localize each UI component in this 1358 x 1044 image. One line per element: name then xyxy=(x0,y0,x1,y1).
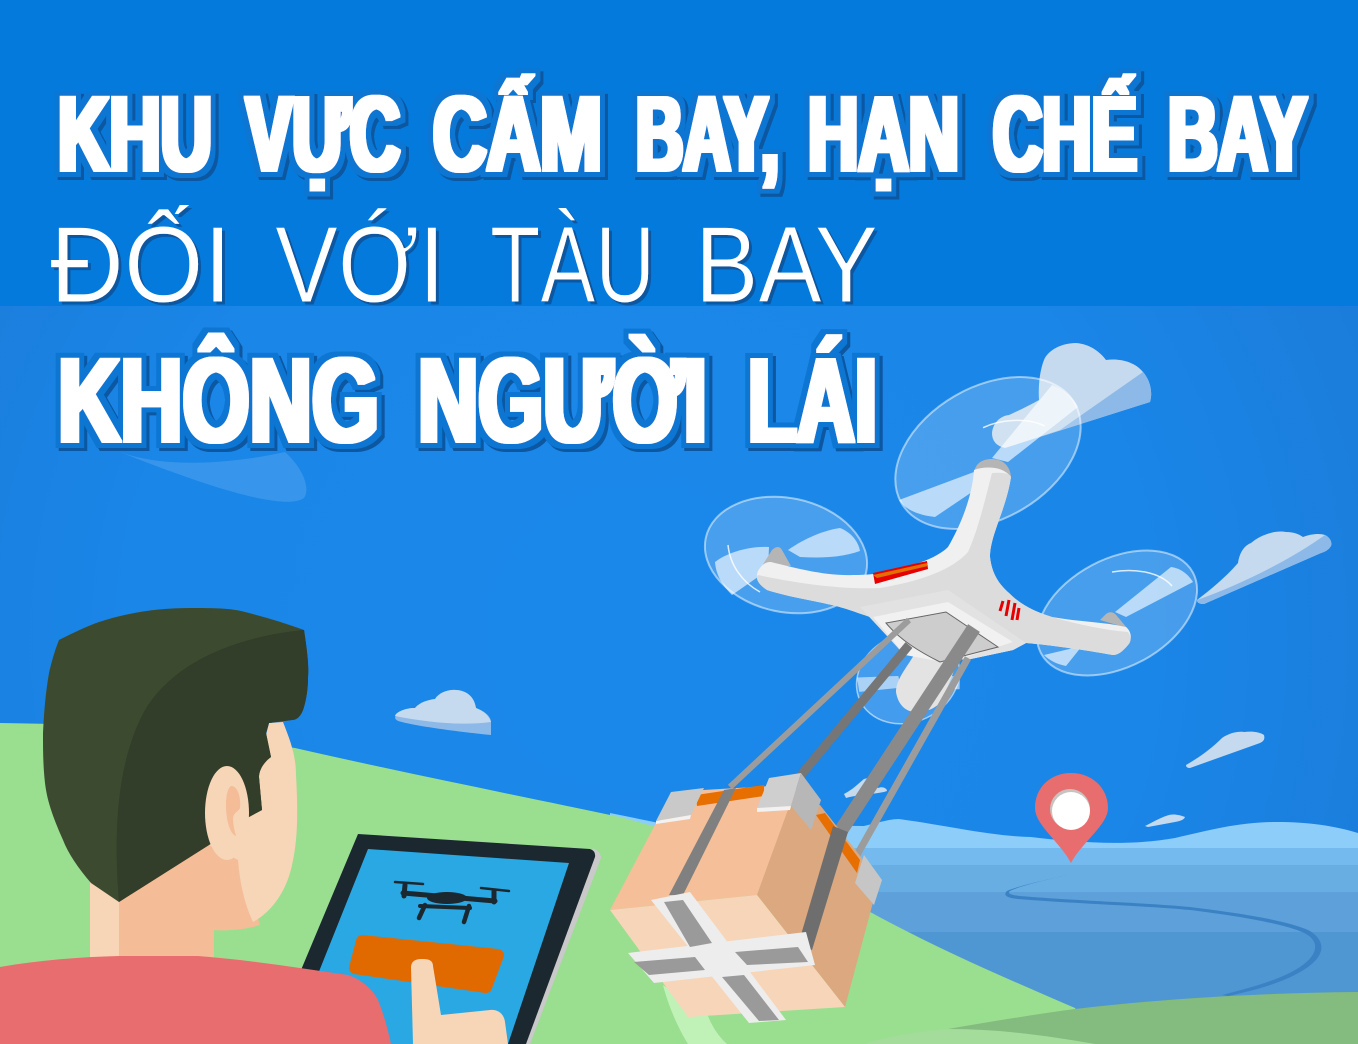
right face xyxy=(757,805,879,1007)
title line 3: LÁI xyxy=(748,332,877,468)
back top xyxy=(703,784,879,900)
title line 2: TÀU xyxy=(490,204,655,326)
lower arm xyxy=(896,655,957,712)
hub plate xyxy=(860,590,1026,660)
shirt xyxy=(0,956,391,1044)
title line 2: ĐỐI xyxy=(50,204,232,326)
right rotor xyxy=(1016,525,1218,701)
person xyxy=(0,608,508,1044)
title line 2 xyxy=(50,204,878,326)
main shell xyxy=(757,468,1131,660)
title line 3: KHÔNG xyxy=(58,332,379,468)
parcel xyxy=(610,773,882,1023)
hub inner panel xyxy=(886,612,998,662)
cloud: tiny right xyxy=(1145,814,1185,827)
red bar xyxy=(873,561,928,584)
cloud: lower right xyxy=(1186,732,1264,768)
face xyxy=(209,722,297,922)
dark green hill xyxy=(948,992,1358,1044)
top rotor xyxy=(868,346,1108,560)
corner bracket middle xyxy=(757,773,821,830)
title line 2: BAY xyxy=(695,204,878,326)
hair xyxy=(43,608,308,902)
tablet frame xyxy=(270,834,595,1044)
clouds xyxy=(395,343,1331,827)
cloud: right xyxy=(1197,532,1331,604)
red vents xyxy=(1000,600,1019,620)
corner bracket right xyxy=(855,855,882,905)
motor caps xyxy=(974,459,1011,477)
icon: drone on screen xyxy=(395,882,509,922)
title line 2: VỚI xyxy=(275,204,445,326)
tablet xyxy=(270,834,601,1044)
title line 1: BAY, xyxy=(636,73,779,194)
neck xyxy=(90,835,214,962)
bottom face xyxy=(610,895,845,1017)
hills xyxy=(0,723,1358,1044)
left green hill xyxy=(0,723,1095,1044)
orange strap side xyxy=(816,813,860,873)
title line 3: NGƯỜI xyxy=(418,332,707,468)
title line 1: VỰC xyxy=(246,73,400,194)
grey strap side xyxy=(798,826,848,950)
corner bracket left xyxy=(656,788,704,824)
ear xyxy=(205,766,249,860)
light green foreground rise xyxy=(864,1029,1095,1044)
jaw shadow xyxy=(205,845,260,930)
orange strap top xyxy=(696,785,764,806)
sea xyxy=(610,813,1358,1044)
cloud: small left xyxy=(395,690,491,735)
hand xyxy=(411,959,508,1044)
location pin xyxy=(1035,773,1108,863)
tether cords xyxy=(730,620,974,855)
title xyxy=(50,73,1307,468)
bottom rotor xyxy=(841,616,975,740)
left face xyxy=(610,785,790,910)
shell shading xyxy=(757,473,1131,660)
tape cross xyxy=(628,892,815,1023)
title line 1: HẠN xyxy=(808,73,959,194)
title line 1: KHU xyxy=(58,73,212,194)
left rotor xyxy=(694,482,878,628)
tablet screen xyxy=(290,849,569,1044)
title line 1: CHẾ xyxy=(993,73,1137,194)
drone body xyxy=(757,459,1131,712)
orange button xyxy=(355,941,498,987)
title line 1 xyxy=(58,73,1307,194)
route line on the water xyxy=(1005,875,1321,996)
tablet edge xyxy=(520,848,601,1044)
pale path xyxy=(663,985,727,1044)
cloud: tiny near box xyxy=(844,778,887,798)
cloud: top right xyxy=(992,343,1151,448)
title line 1: CẤM xyxy=(433,73,602,194)
grey strap front xyxy=(669,788,736,895)
cloud behind title xyxy=(120,452,306,502)
title line 3 xyxy=(58,332,877,468)
